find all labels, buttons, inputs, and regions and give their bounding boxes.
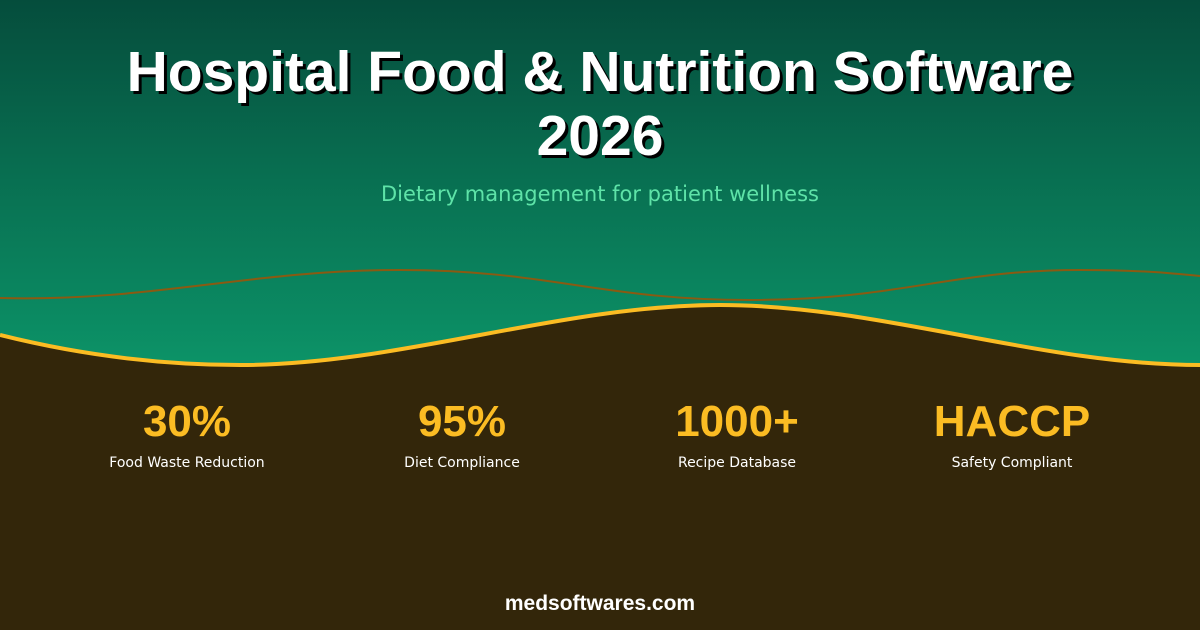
stat: 95%: Diet Compliance (404, 455, 520, 471)
subtitle: Dietary management for patient wellness (381, 182, 819, 206)
stat: HACCP: HACCP (934, 397, 1090, 446)
footer url: medsoftwares.com (505, 592, 695, 615)
title: 2026 (537, 104, 663, 168)
title: Hospital Food & Nutrition Software (127, 40, 1073, 104)
stat: 30% (109, 397, 265, 471)
stat: 30%: 30% (143, 397, 231, 446)
stat: 1000+: 1000+ (675, 397, 799, 446)
stat: 95%: 95% (418, 397, 506, 446)
stat: 1000+: Recipe Database (678, 455, 796, 471)
title (127, 40, 1074, 168)
stat: 30%: Food Waste Reduction (109, 455, 265, 471)
stat: 1000+ (675, 397, 799, 471)
stat: 95% (404, 397, 520, 471)
stat: HACCP: Safety Compliant (952, 455, 1072, 471)
stat: HACCP (934, 397, 1090, 471)
